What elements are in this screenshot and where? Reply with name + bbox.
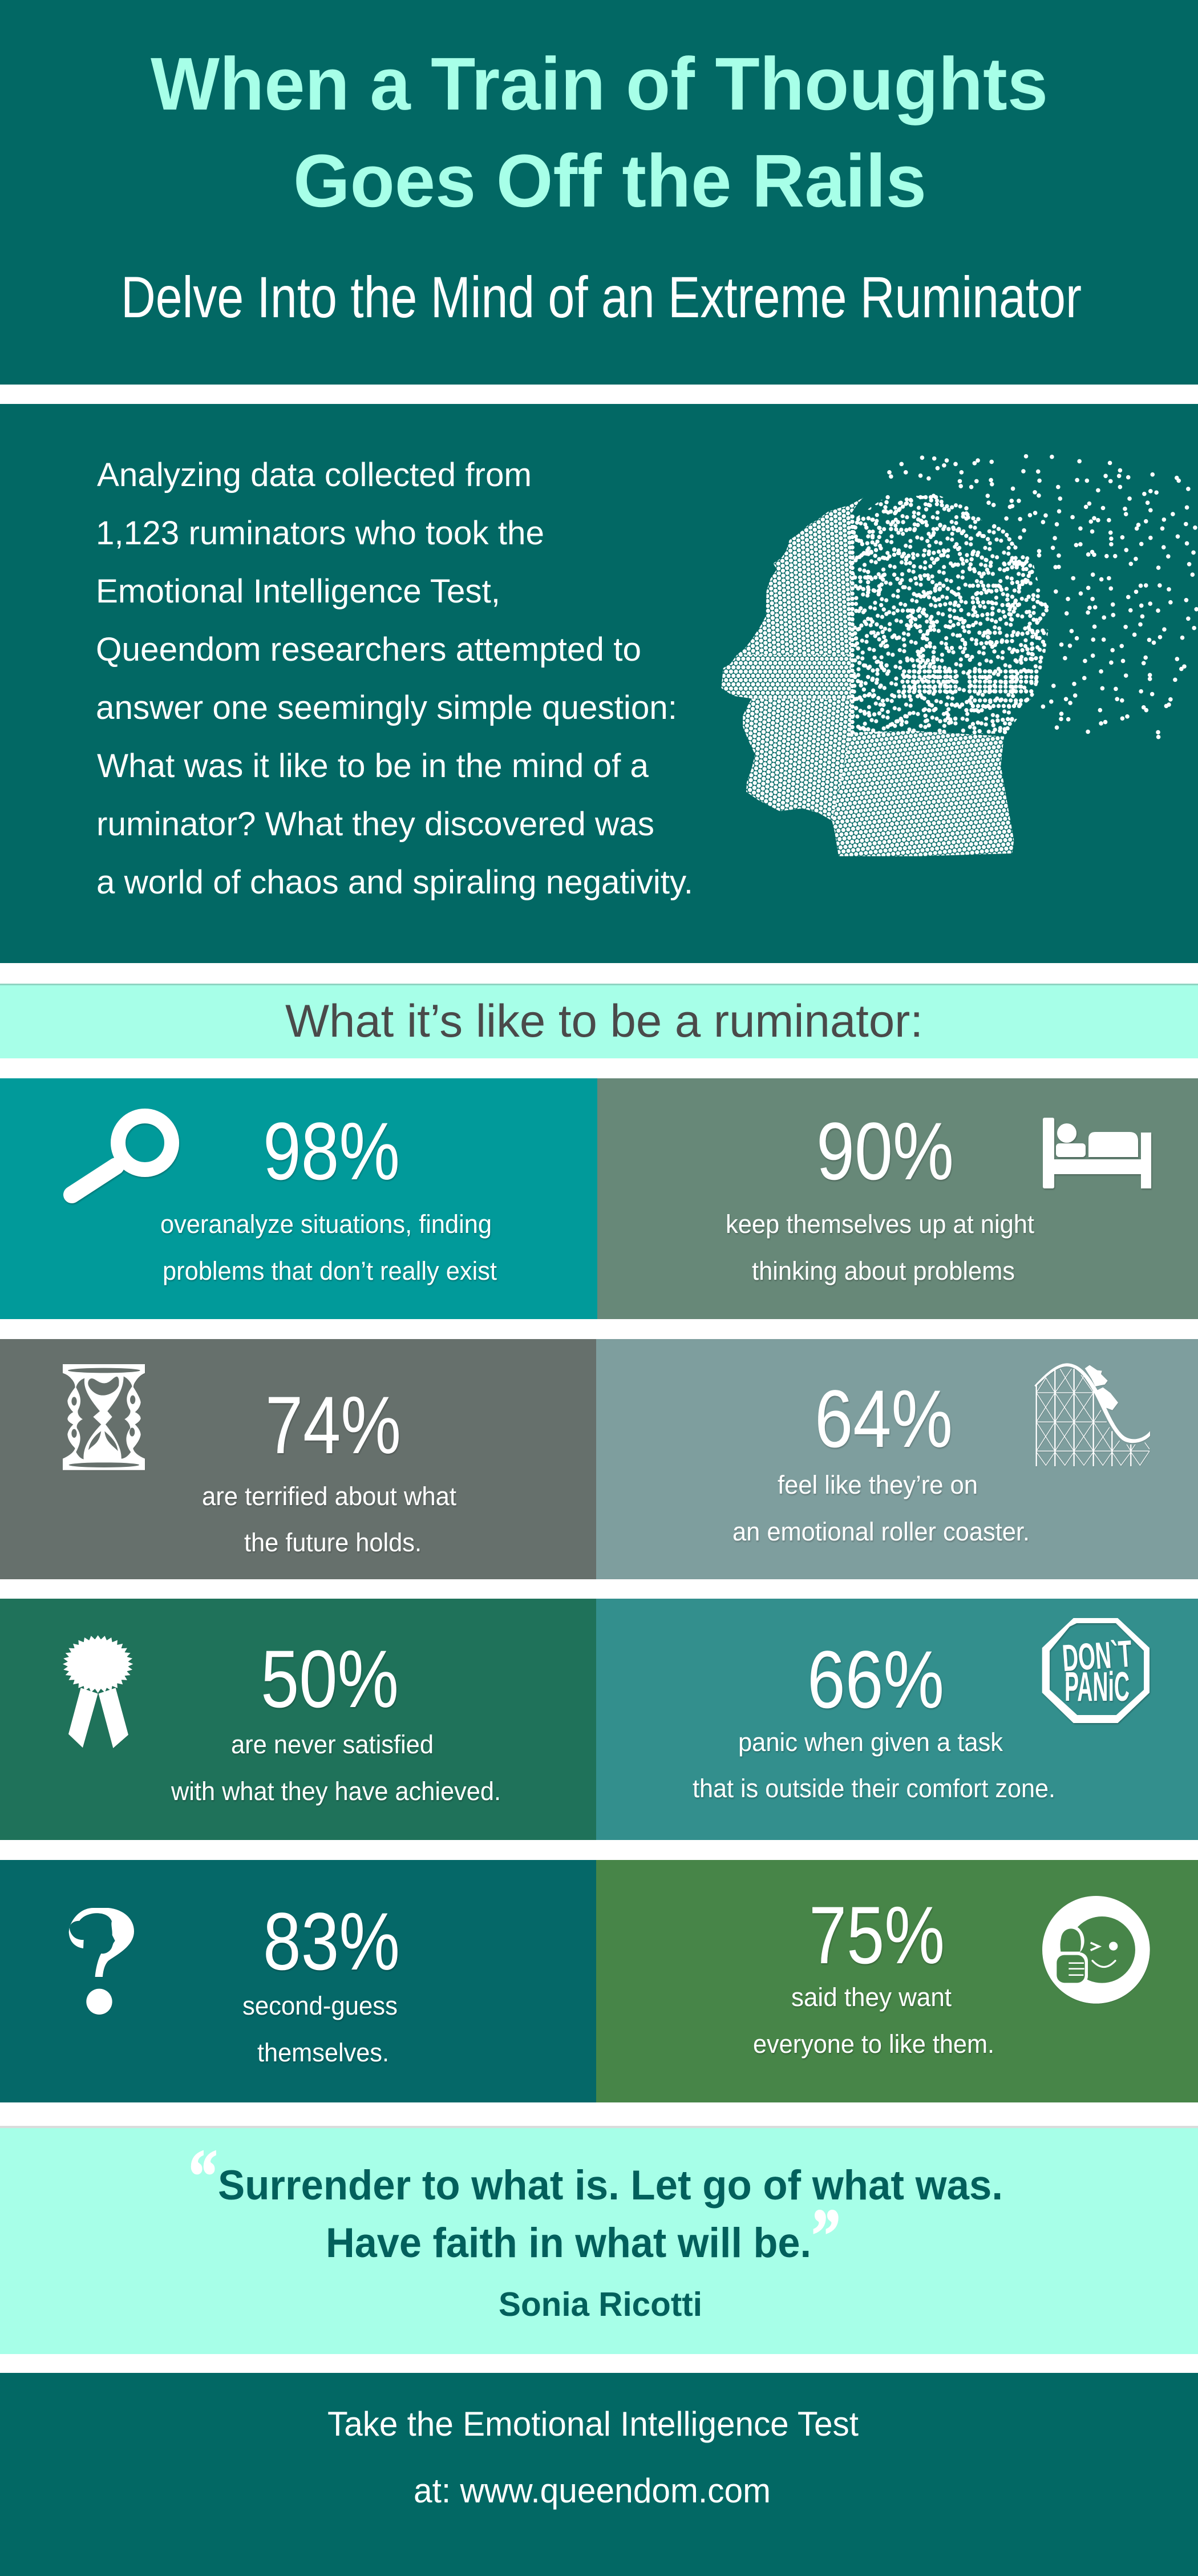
description: an emotional roller coaster. xyxy=(732,1517,1030,1546)
icon: don't panic sign xyxy=(1042,1618,1150,1723)
stat: 74%: 74% xyxy=(265,1380,401,1471)
icon: award ribbon xyxy=(58,1631,139,1748)
opening quote mark: “ xyxy=(189,2135,217,2217)
intro text block: Emotional Intelligence Test, xyxy=(96,573,500,610)
panel: 75% want to be liked xyxy=(596,1860,1198,2102)
icon: hourglass xyxy=(63,1364,145,1470)
panel: section heading xyxy=(0,984,1198,1058)
icon: don't panic sign: DON`T xyxy=(1061,1632,1134,1679)
panel: 50% never satisfied xyxy=(0,1599,596,1840)
description xyxy=(160,1210,497,1285)
description: with what they have achieved. xyxy=(171,1777,501,1806)
icon: question mark with silhouette xyxy=(69,1908,134,2015)
icon: bed xyxy=(1043,1118,1151,1188)
description: feel like they’re on xyxy=(778,1470,978,1499)
description: everyone to like them. xyxy=(753,2029,994,2059)
panel: quote xyxy=(0,2126,1198,2354)
title: When a Train of Thoughts xyxy=(151,42,1048,126)
quote text: Surrender to what is. Let go of what was. xyxy=(218,2162,1003,2209)
title: Goes Off the Rails xyxy=(293,139,926,223)
description xyxy=(242,1991,398,2067)
panel: 98% overanalyze xyxy=(0,1078,597,1319)
description: keep themselves up at night xyxy=(726,1210,1034,1239)
description xyxy=(732,1470,1030,1546)
description: overanalyze situations, finding xyxy=(160,1210,492,1239)
panel: introduction xyxy=(0,404,1198,964)
intro text block: a world of chaos and spiraling negativity. xyxy=(96,864,693,901)
description: said they want xyxy=(791,1983,952,2012)
quote text xyxy=(218,2162,1003,2266)
description xyxy=(726,1210,1034,1285)
panel: 74% terrified xyxy=(0,1339,596,1579)
stat: 98%: 98% xyxy=(263,1106,400,1197)
description: are terrified about what xyxy=(202,1482,456,1511)
panel: 90% up at night xyxy=(597,1078,1198,1319)
quote author: Sonia Ricotti xyxy=(499,2286,702,2323)
panel: 83% second-guess xyxy=(0,1860,596,2102)
panel: footer call to action: Take the Emotional Intelligence Test xyxy=(327,2405,859,2443)
description xyxy=(753,1983,994,2059)
panel: header xyxy=(0,0,1198,385)
panel: 64% roller coaster xyxy=(596,1339,1198,1579)
panel: footer call to action: at: www.queendom.com xyxy=(414,2472,771,2510)
intro text block: Queendom researchers attempted to xyxy=(96,631,641,668)
description: themselves. xyxy=(257,2038,389,2067)
description: that is outside their comfort zone. xyxy=(693,1774,1055,1803)
icon: magnifying glass xyxy=(72,1116,172,1195)
intro text block: ruminator? What they discovered was xyxy=(96,806,654,843)
description: panic when given a task xyxy=(738,1728,1003,1757)
panel: 66% panic xyxy=(596,1599,1198,1840)
stat: 66%: 66% xyxy=(807,1635,944,1725)
intro text block: answer one seemingly simple question: xyxy=(96,689,677,726)
stat: 90%: 90% xyxy=(816,1106,954,1197)
description: are never satisfied xyxy=(231,1730,434,1759)
intro text block: Analyzing data collected from xyxy=(97,456,532,494)
icon: roller coaster xyxy=(1034,1363,1150,1466)
stat: 75%: 75% xyxy=(809,1890,945,1981)
illustration: dotted head dissolving into scattered dots xyxy=(721,454,1198,856)
icon: winking face with thumbs up xyxy=(1042,1896,1150,2004)
panel: footer call to action xyxy=(0,2373,1198,2576)
panel: section heading: What it’s like to be a ruminator: xyxy=(285,996,923,1047)
description xyxy=(693,1728,1055,1803)
description: problems that don’t really exist xyxy=(163,1256,497,1285)
stat: 50%: 50% xyxy=(261,1634,399,1725)
description xyxy=(171,1730,501,1806)
title xyxy=(151,42,1048,223)
description xyxy=(202,1482,456,1557)
closing quote mark: ” xyxy=(812,2194,840,2276)
description: second-guess xyxy=(242,1991,398,2020)
icon: don't panic sign: PANiC xyxy=(1065,1664,1130,1710)
intro text block xyxy=(96,456,693,901)
description: the future holds. xyxy=(244,1528,422,1557)
intro text block: 1,123 ruminators who took the xyxy=(96,515,544,552)
quote text: Have faith in what will be. xyxy=(326,2220,811,2266)
stat: 64%: 64% xyxy=(815,1374,953,1465)
stat: 83%: 83% xyxy=(263,1896,400,1987)
description: thinking about problems xyxy=(752,1256,1015,1285)
intro text block: What was it like to be in the mind of a xyxy=(97,747,649,784)
